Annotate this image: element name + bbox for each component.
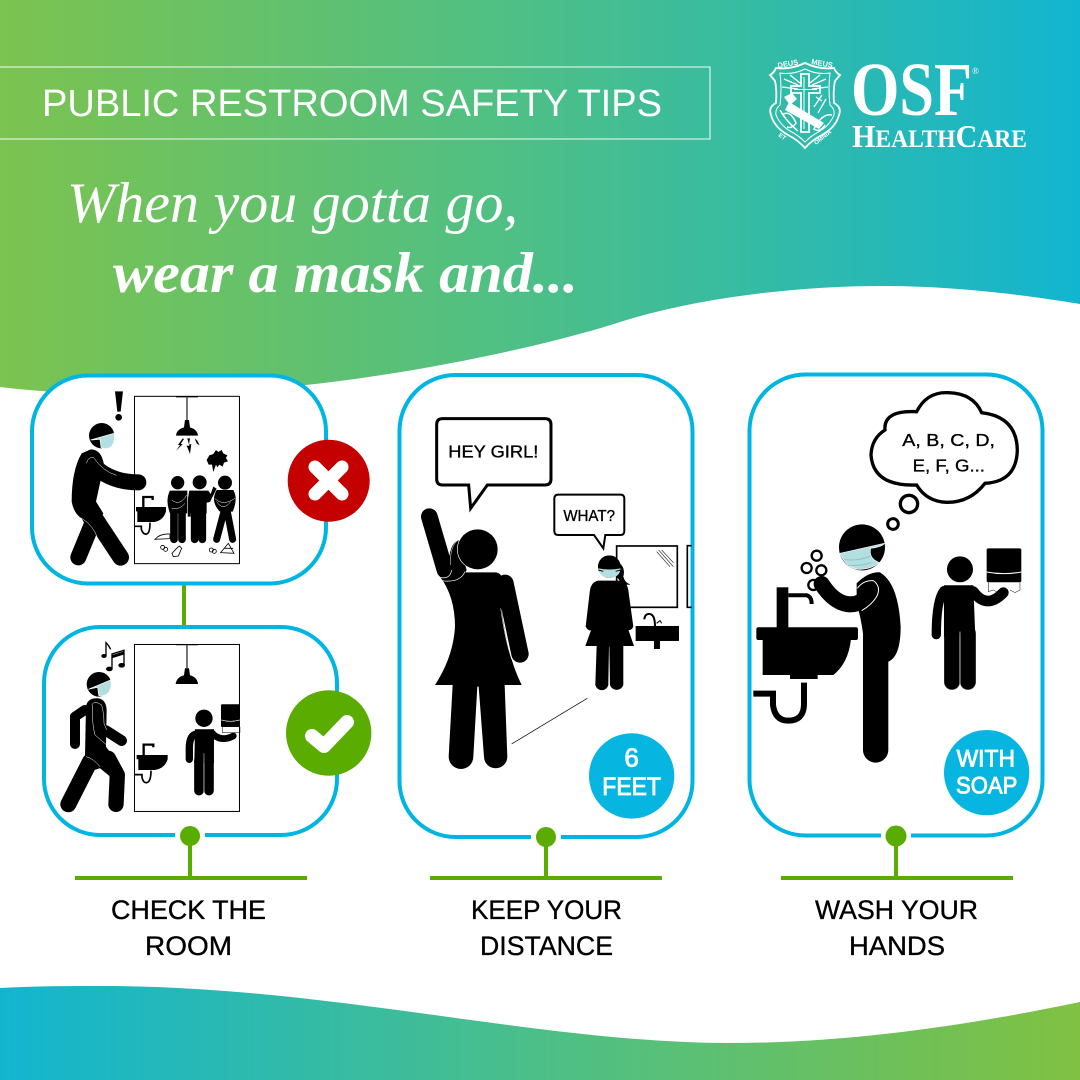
- thought bubble: alphabet: A, B, C, D,: [902, 430, 995, 450]
- sink with faucet: [753, 587, 858, 721]
- badge: with soap: SOAP: [956, 772, 1017, 799]
- thought bubble: alphabet: E, F, G...: [913, 456, 985, 476]
- masked person at the door: [72, 423, 138, 557]
- sink: [135, 497, 166, 534]
- person at towel dispenser: [936, 548, 1021, 690]
- label: keep your distance: KEEP YOUR: [471, 895, 622, 925]
- top gradient wave banner: [0, 0, 1080, 394]
- headline: [67, 172, 578, 305]
- label: check the room: [75, 826, 307, 961]
- logo: shield crest: ET: [777, 133, 787, 142]
- label: check the room: ROOM: [145, 931, 232, 961]
- badge: 6 feet: FEET: [602, 774, 661, 801]
- litter on the floor: [155, 534, 234, 557]
- OSF HealthCare logo: [770, 48, 1027, 154]
- label: wash your hands: [781, 826, 1013, 961]
- label: keep your distance: DISTANCE: [480, 931, 613, 961]
- logo: wordmark HealthCare: HEALTHCARE: [852, 118, 1027, 154]
- badge: with soap: [944, 730, 1029, 815]
- connector between check-the-room panels: [182, 583, 186, 628]
- sink: [135, 745, 168, 783]
- badge: 6 feet: 6: [624, 743, 639, 773]
- pin connector: [430, 827, 662, 880]
- label: check the room: CHECK THE: [111, 895, 266, 925]
- headline: wear a mask and...: [113, 242, 578, 305]
- pin connector: [781, 826, 1013, 880]
- thought bubble: alphabet: [871, 393, 1017, 529]
- ceiling lamp: [176, 645, 198, 684]
- badge: with soap: WITH: [957, 746, 1015, 773]
- good scene drawing: [68, 643, 240, 811]
- bad scene drawing: [72, 391, 239, 564]
- crowd of three people: [167, 475, 236, 539]
- ceiling lamp flickering: [176, 397, 200, 454]
- icon: music notes: [101, 643, 125, 671]
- logo: shield crest: MEUS: [811, 57, 834, 70]
- small woman in mask: [585, 555, 634, 690]
- wall graffiti splat: [207, 450, 228, 472]
- panel: keep your distance: [400, 375, 692, 837]
- logo: shield crest: DEUS: [777, 57, 799, 70]
- room frame: [134, 396, 239, 564]
- big woman waving: [429, 517, 522, 769]
- label: wash your hands: HANDS: [849, 931, 945, 961]
- masked person walking: [68, 672, 124, 804]
- title box: PUBLIC RESTROOM SAFETY TIPS: [42, 83, 662, 125]
- panel: check the room, bad example: [32, 376, 326, 584]
- logo: shield crest: OMNIA: [814, 129, 834, 147]
- logo: registered mark: ®: [972, 66, 979, 76]
- speech bubble: hey girl: HEY GIRL!: [448, 442, 538, 462]
- panel: wash your hands: [750, 374, 1042, 836]
- title box: [0, 67, 710, 139]
- person at towel dispenser: [189, 704, 240, 795]
- room frame: [134, 644, 239, 811]
- label: wash your hands: WASH YOUR: [815, 895, 978, 925]
- mirror and sink: [617, 546, 692, 649]
- icon: green check: [286, 690, 371, 776]
- speech bubble: what: WHAT?: [563, 508, 615, 525]
- bottom gradient wave: [0, 986, 1080, 1080]
- icon: red X: [288, 440, 370, 522]
- panel: check the room, good example: [44, 627, 337, 835]
- label: keep your distance: [430, 827, 662, 961]
- person washing hands: [822, 524, 901, 763]
- pin connector: [75, 826, 307, 880]
- distance line: [512, 698, 587, 744]
- badge: 6 feet: [589, 733, 674, 819]
- soap bubbles: [802, 551, 826, 590]
- headline: When you gotta go,: [67, 172, 518, 235]
- logo: shield crest: [770, 57, 840, 148]
- speech bubble: what: [554, 495, 624, 548]
- logo: wordmark OSF: OSF: [851, 48, 972, 132]
- exclamation mark: [115, 391, 123, 421]
- speech bubble: hey girl: [437, 419, 551, 508]
